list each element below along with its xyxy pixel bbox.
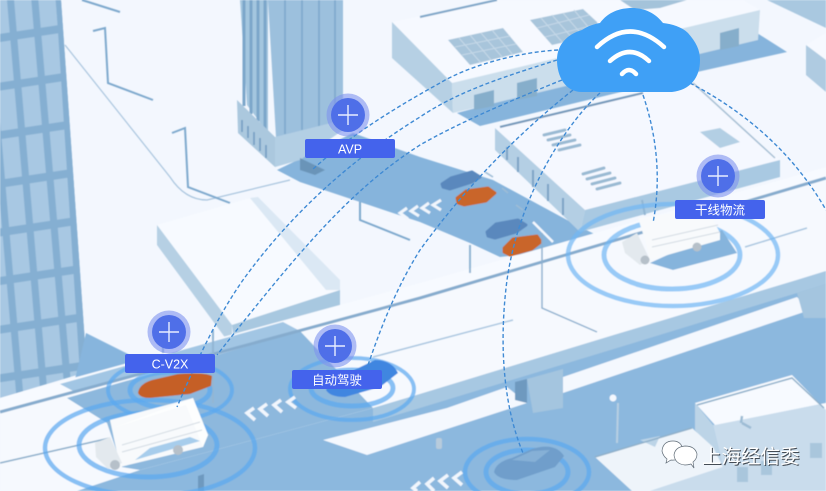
upper warehouse <box>392 0 760 113</box>
parking lot and tower shadow <box>277 133 607 257</box>
marker: 自动驾驶: 自动驾驶 <box>312 372 362 388</box>
rings: bottom car <box>465 439 589 491</box>
small car near tower <box>300 158 325 175</box>
ground lamp <box>610 394 618 443</box>
signal rings <box>45 204 778 491</box>
rings: autonomous car <box>290 358 414 420</box>
left bus <box>95 398 208 470</box>
facade windows <box>507 147 563 215</box>
thin curb line <box>65 45 290 200</box>
central tower <box>237 0 343 167</box>
blue autonomous car <box>326 360 398 397</box>
marker: C-V2X: C-V2X <box>152 358 189 372</box>
small bollard <box>436 438 442 449</box>
sidewalk under road <box>323 387 527 455</box>
left skyscraper <box>0 0 87 398</box>
facade windows <box>737 443 822 482</box>
road shadow on deck <box>67 331 373 470</box>
chevrons in parking lot <box>400 200 441 219</box>
road side face <box>373 271 826 422</box>
upper warehouse shadow <box>457 33 787 126</box>
road poles <box>163 200 645 403</box>
road junction line <box>542 233 597 332</box>
watermark: WeChat account: 上海经信委 <box>702 446 800 468</box>
shadow of left skyscraper <box>70 333 240 400</box>
low white pavilion <box>157 197 340 347</box>
rings: C-V2X car <box>108 360 232 420</box>
orange car <box>138 373 212 398</box>
marker: C-V2X <box>125 310 215 373</box>
marker: 干线物流 <box>675 154 765 219</box>
chevrons on road <box>247 397 462 491</box>
loading doors <box>474 28 739 110</box>
marker: AVP <box>305 94 395 158</box>
marker: 自动驾驶 <box>292 324 382 389</box>
skylights <box>620 0 687 10</box>
upper right buildings <box>767 0 826 28</box>
central warehouse <box>495 83 780 232</box>
lower right building <box>595 375 826 491</box>
parking slot marks <box>485 172 553 242</box>
lane lines <box>0 228 807 463</box>
elevated road deck <box>0 178 826 491</box>
rings: right bus <box>568 204 778 306</box>
barrier shadow section <box>60 322 300 392</box>
rings: left bus <box>45 400 255 491</box>
dashed connection lines <box>177 50 826 453</box>
right bus <box>622 208 737 270</box>
street lamps on ground <box>82 0 410 240</box>
watermark: WeChat account <box>662 441 800 468</box>
barrier wall <box>0 167 826 412</box>
ground under elevated road <box>43 271 826 491</box>
roof vents <box>544 130 620 189</box>
marker: AVP: AVP <box>338 142 362 156</box>
bottom car <box>494 447 564 480</box>
sidewalk right of pillar <box>563 297 810 393</box>
parked cars <box>442 172 541 255</box>
cloud with wifi icon <box>557 8 700 92</box>
pillars <box>198 284 826 491</box>
barrier dark line <box>0 178 826 412</box>
marker: 干线物流: 干线物流 <box>695 204 745 218</box>
icon: wechat bubbles <box>662 441 697 468</box>
solar panel groups <box>448 9 600 65</box>
